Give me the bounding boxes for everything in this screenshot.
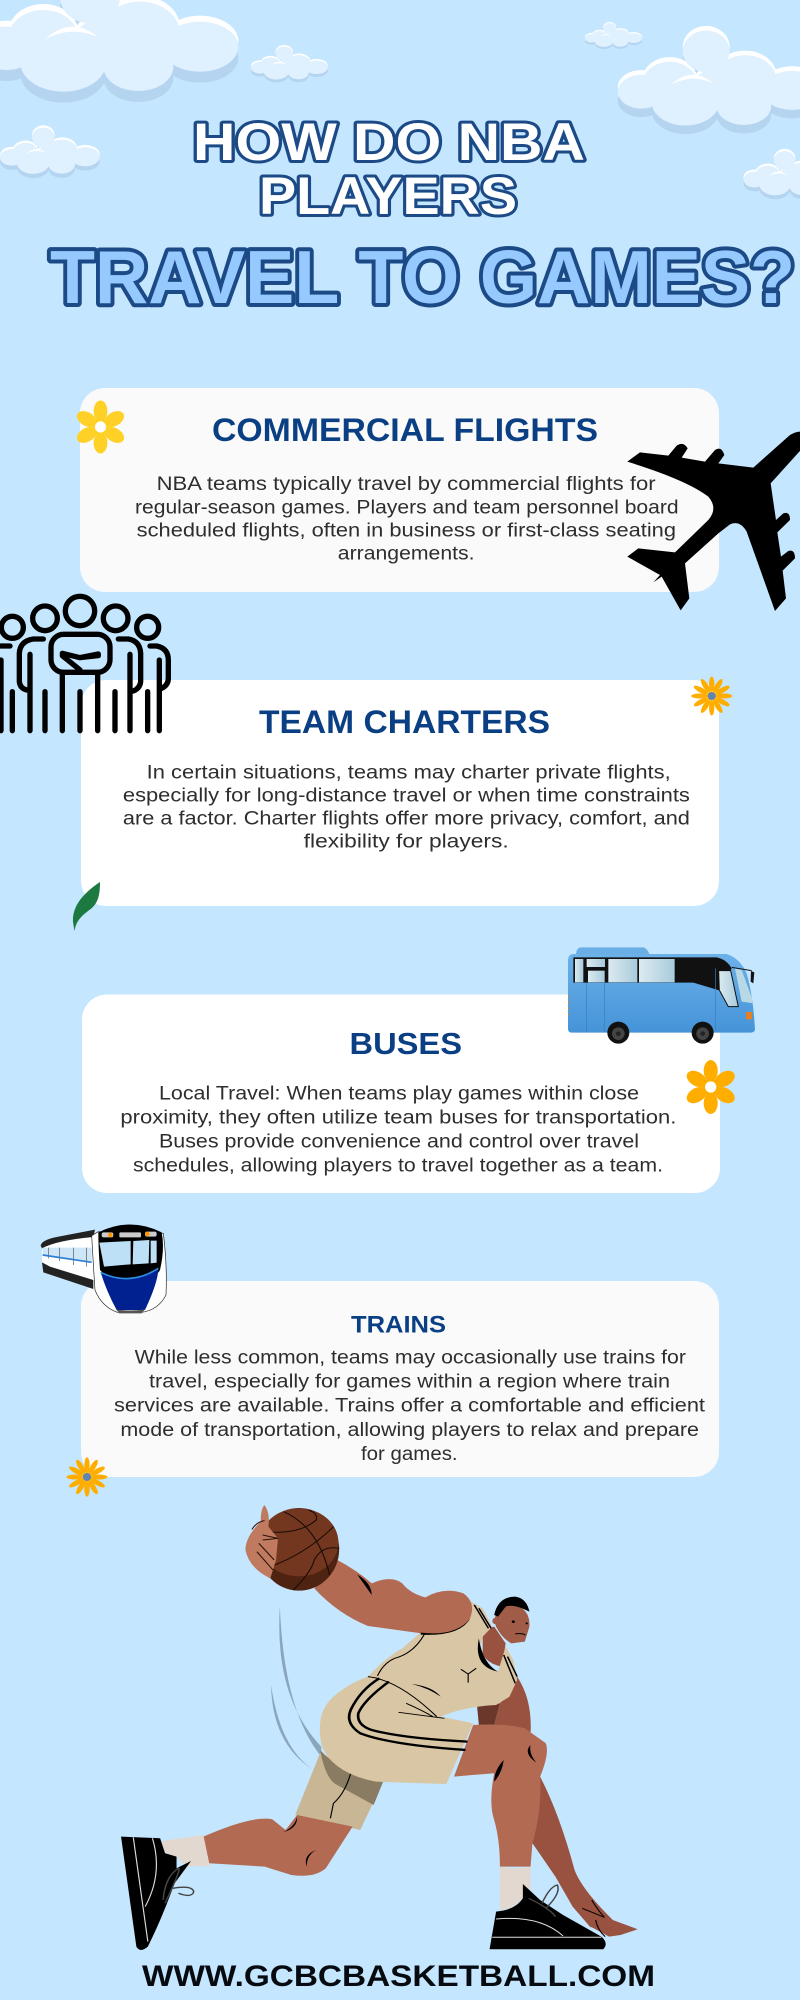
- text: trains body: services are available. Trains offer a comfortable and efficient: [114, 1396, 706, 1417]
- head: [492, 1597, 529, 1643]
- text: trains body: mode of transportation, allowing players to relax and prepare: [120, 1420, 699, 1441]
- heading: buses: BUSES: [350, 1026, 462, 1061]
- text: team charters body: especially for long-distance travel or when time constraints: [123, 785, 690, 806]
- text: trains body: travel, especially for games within a region where train: [149, 1372, 670, 1392]
- text: commercial flights body: [135, 474, 679, 564]
- heading: commercial flights: COMMERCIAL FLIGHTS: [212, 412, 598, 448]
- raised arm: [314, 1560, 472, 1634]
- text: commercial flights body: scheduled flights, often in business or first-class seating: [137, 520, 676, 541]
- icon: orange flower: [684, 1060, 738, 1114]
- back arm: [494, 1677, 638, 1937]
- heading: team charters: TEAM CHARTERS: [259, 704, 550, 740]
- text: buses body: proximity, they often utilize team buses for transportation.: [120, 1108, 676, 1128]
- hand: [245, 1505, 278, 1578]
- panel: trains: [81, 1281, 719, 1477]
- text: trains body: While less common, teams may occasionally use trains for: [135, 1347, 687, 1368]
- text: buses body: Buses provide convenience and control over travel: [159, 1132, 639, 1153]
- icon: train: [41, 1224, 166, 1313]
- clouds: [0, 0, 800, 199]
- title: TRAVEL TO GAMES?: [50, 235, 795, 319]
- illustration: basketball player: [121, 1505, 638, 1950]
- basketball: [259, 1508, 339, 1591]
- back leg: [295, 1753, 383, 1830]
- jersey and shorts: [320, 1602, 517, 1784]
- text: commercial flights body: arrangements.: [338, 543, 474, 564]
- icon: orange daisy: [691, 676, 732, 716]
- title: [50, 113, 795, 319]
- heading: trains: TRAINS: [351, 1312, 446, 1338]
- title: PLAYERS: [259, 167, 517, 226]
- text: team charters body: In certain situations, teams may charter private flights,: [147, 762, 671, 783]
- icon: orange daisy bottom: [66, 1457, 108, 1497]
- text: team charters body: [123, 762, 690, 852]
- panel: buses: [82, 994, 720, 1193]
- text: team charters body: are a factor. Charter flights offer more privacy, comfort, and: [123, 808, 690, 829]
- text: buses body: Local Travel: When teams play games within close: [159, 1083, 639, 1104]
- icon: airplane: [627, 432, 800, 611]
- neck: [483, 1627, 506, 1667]
- text: commercial flights body: regular-season games. Players and team personnel board: [135, 497, 679, 518]
- panel: commercial flights: [80, 388, 719, 592]
- text: trains body: [114, 1347, 706, 1465]
- text: commercial flights body: NBA teams typically travel by commercial flights for: [157, 474, 656, 495]
- icon: green leaf: [73, 882, 100, 931]
- footer: website: WWW.GCBCBASKETBALL.COM: [142, 1960, 655, 1993]
- text: buses body: [120, 1083, 676, 1177]
- icon: bus: [568, 947, 755, 1044]
- front leg: [454, 1725, 547, 1867]
- title: HOW DO NBA: [193, 113, 585, 172]
- icon: yellow flower: [74, 400, 127, 454]
- motion lines: [271, 1607, 321, 1769]
- text: buses body: schedules, allowing players to travel together as a team.: [133, 1156, 663, 1177]
- text: team charters body: flexibility for players.: [304, 831, 509, 852]
- icon: people group: [0, 596, 168, 731]
- panel: team charters: [81, 680, 719, 906]
- text: trains body: for games.: [361, 1444, 458, 1465]
